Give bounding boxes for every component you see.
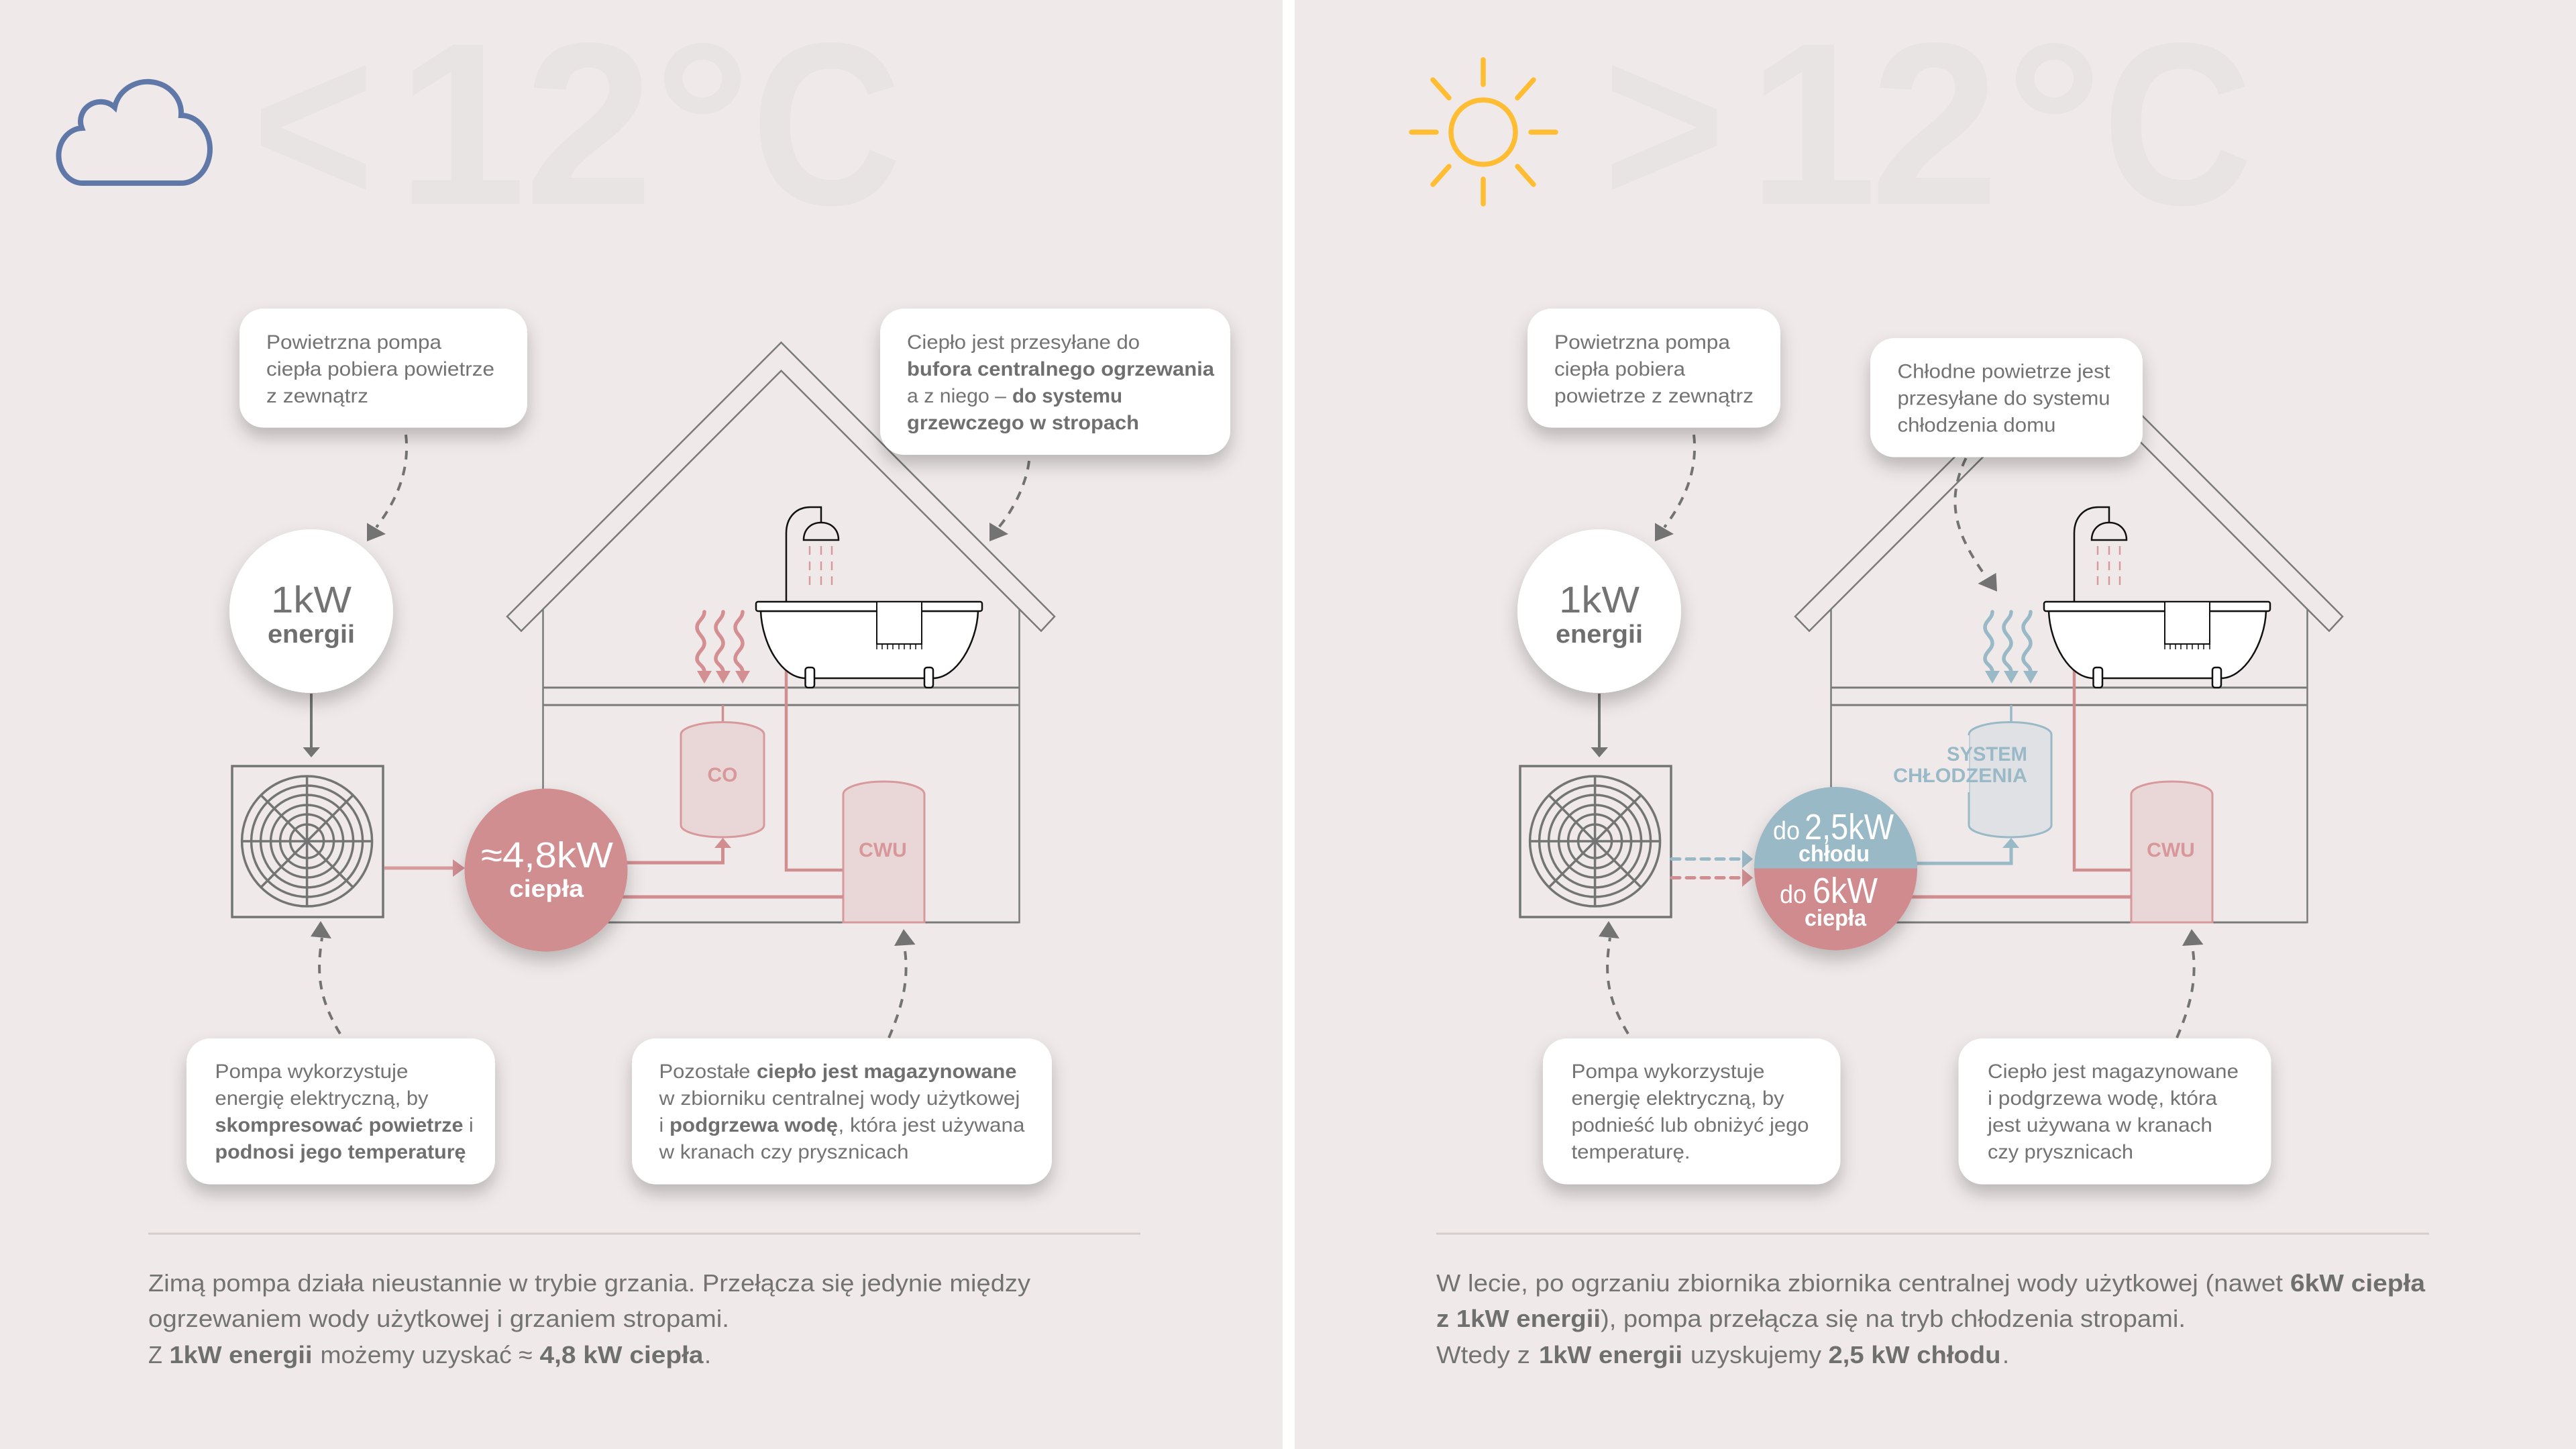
text block: summer summary: Wtedy z bbox=[1436, 1341, 1530, 1368]
callout: heat storage: i bbox=[659, 1114, 663, 1136]
callout: electricity use: temperaturę. bbox=[1571, 1141, 1690, 1163]
callout: heat storage: i podgrzewa wodę, która bbox=[1988, 1087, 2217, 1110]
callout: heat storage: ciepło jest magazynowane bbox=[757, 1061, 1017, 1083]
heading: above 12 degrees: C bbox=[2102, 0, 2253, 254]
tank: cooling system: CHŁODZENIA bbox=[1893, 765, 2027, 787]
arrow: heat to CWU tank bbox=[1905, 895, 2131, 899]
callout: heat storage: czy prysznicach bbox=[1988, 1141, 2133, 1163]
callout: heat storage: w kranach czy prysznicach bbox=[658, 1141, 908, 1163]
dashed arrow: compressor callout to fan bbox=[311, 921, 340, 1034]
callout: cool air: Chłodne powietrze jest bbox=[1897, 361, 2110, 382]
heading: below 12 degrees: 2 bbox=[525, 0, 653, 254]
tank: CWU: CWU bbox=[859, 839, 907, 861]
hot water pipe to bathtub bbox=[786, 668, 843, 870]
arrow: 1kW to fan unit bbox=[303, 694, 320, 757]
callout: heat to buffer: Ciepło jest przesyłane do bbox=[907, 331, 1140, 354]
text block: winter summary: Zimą pompa działa nieustannie w trybie grzania. Przełącza się jedynie między bbox=[148, 1269, 1030, 1297]
icon: cloud bbox=[58, 82, 210, 183]
tank: cooling system bbox=[1893, 705, 2051, 837]
circle: cooling and heating output: 2,5kW bbox=[1805, 807, 1894, 847]
circle: 1kW energy bbox=[1517, 529, 1681, 693]
circle: 1kW energy bbox=[229, 529, 393, 693]
icon: cooling waves bbox=[1985, 612, 2038, 684]
callout: heat to buffer: bufora centralnego ogrzewania bbox=[907, 358, 1214, 380]
tank: CWU bbox=[2131, 782, 2212, 922]
arrow: cold to cooling tank bbox=[1912, 838, 2019, 863]
tank: CWU: CWU bbox=[2147, 839, 2195, 861]
callout: air intake: powietrze z zewnątrz bbox=[1554, 385, 1754, 407]
circle: 1kW energy: 1kW bbox=[271, 578, 352, 621]
icon: sun bbox=[1411, 60, 1556, 204]
callout: heat storage: podgrzewa wodę bbox=[669, 1114, 838, 1136]
callout: air intake: ciepła pobiera bbox=[1554, 358, 1685, 380]
callout: heat to buffer bbox=[880, 309, 1230, 455]
callout: heat storage bbox=[1959, 1038, 2271, 1185]
text block: winter summary: 1kW energii bbox=[169, 1341, 313, 1368]
tank: cooling system: SYSTEM bbox=[1947, 743, 2027, 765]
panel: winter, below 12 degrees bbox=[58, 0, 1230, 1368]
circle: 1kW energy: energii bbox=[1556, 621, 1643, 649]
callout: cool air bbox=[1870, 338, 2143, 458]
tank: CO: CO bbox=[707, 764, 738, 786]
callout: electricity use: energię elektryczną, by bbox=[1571, 1087, 1784, 1110]
heading: above 12 degrees: 1 bbox=[1748, 0, 1877, 254]
text block: summer summary bbox=[1436, 1269, 2426, 1368]
arrow: fan unit to heat output bbox=[384, 859, 465, 877]
callout: heat to buffer: grzewczego w stropach bbox=[907, 412, 1139, 434]
tank: CO bbox=[681, 705, 764, 837]
callout: air intake bbox=[1527, 309, 1780, 428]
heading: below 12 degrees: ° bbox=[653, 0, 751, 254]
callout: electricity use: podnieść lub obniżyć jego bbox=[1571, 1114, 1809, 1136]
circle: cooling and heating output: do bbox=[1773, 817, 1800, 845]
callout: compression: podnosi jego temperaturę bbox=[215, 1141, 466, 1163]
text block: winter summary: . bbox=[704, 1341, 711, 1368]
text block: winter summary bbox=[148, 1269, 1030, 1368]
callout: heat storage bbox=[632, 1038, 1052, 1185]
heading: below 12 degrees bbox=[252, 0, 902, 254]
callout: heat storage: w zbiorniku centralnej wody użytkowej bbox=[658, 1087, 1020, 1110]
dashed arrow: storage callout to CWU bbox=[2177, 929, 2203, 1038]
callout: compression bbox=[186, 1038, 495, 1185]
heading: below 12 degrees: 1 bbox=[397, 0, 526, 254]
circle: 4.8kW heat: ciepła bbox=[509, 875, 584, 902]
dashed arrow: heat to ceiling system bbox=[989, 461, 1029, 541]
circle: 4.8kW heat: ≈4,8kW bbox=[481, 835, 613, 875]
circle: 1kW energy: 1kW bbox=[1559, 578, 1640, 621]
callout: cool air: przesyłane do systemu bbox=[1897, 388, 2110, 409]
icon: heat waves bbox=[697, 612, 750, 684]
heading: above 12 degrees: > bbox=[1603, 0, 1725, 254]
text block: summer summary: 6kW ciepła bbox=[2290, 1269, 2426, 1297]
circle: cooling and heating output bbox=[1754, 787, 1917, 950]
callout: heat storage: Ciepło jest magazynowane bbox=[1988, 1061, 2239, 1083]
dashed arrow: electricity callout to fan bbox=[1599, 921, 1628, 1034]
arrow: heat to CO tank bbox=[624, 838, 731, 863]
text block: winter summary: 4,8 kW ciepła bbox=[539, 1341, 704, 1368]
circle: cooling and heating output: ciepła bbox=[1805, 906, 1867, 931]
house outline bbox=[1795, 342, 2343, 922]
icon: shower bbox=[2074, 507, 2127, 602]
circle: 4.8kW heat bbox=[464, 789, 628, 951]
arrow: 1kW to fan unit bbox=[1591, 694, 1608, 757]
text block: summer summary: . bbox=[2002, 1341, 2009, 1368]
heading: below 12 degrees: C bbox=[751, 0, 902, 254]
circle: cooling and heating output: do bbox=[1780, 881, 1807, 909]
callout: heat storage: jest używana w kranach bbox=[1987, 1114, 2212, 1136]
callout: heat to buffer: do systemu bbox=[1012, 385, 1122, 407]
icon: outdoor fan unit bbox=[232, 766, 383, 917]
callout: compression: i bbox=[469, 1114, 474, 1136]
icon: shower bbox=[786, 507, 839, 602]
callout: air intake bbox=[239, 309, 527, 428]
text block: summer summary: W lecie, po ogrzaniu zbiornika zbiornika centralnej wody użytkowej (nawet bbox=[1436, 1269, 2283, 1297]
callout: electricity use bbox=[1543, 1038, 1841, 1185]
text block: winter summary: ogrzewaniem wody użytkowej i grzaniem stropami. bbox=[148, 1305, 729, 1332]
text block: winter summary: możemy uzyskać ≈ bbox=[321, 1341, 533, 1368]
heading: above 12 degrees bbox=[1603, 0, 2253, 254]
dashed arrow: air intake bbox=[1655, 435, 1695, 541]
text block: summer summary: 1kW energii bbox=[1539, 1341, 1682, 1368]
heading: above 12 degrees: ° bbox=[2005, 0, 2103, 254]
tank: CWU bbox=[843, 782, 924, 922]
callout: compression: energię elektryczną, by bbox=[215, 1087, 428, 1110]
circle: cooling and heating output: 6kW bbox=[1813, 871, 1878, 911]
text block: winter summary: Z bbox=[148, 1341, 162, 1368]
icon: outdoor fan unit bbox=[1520, 766, 1671, 917]
callout: air intake: ciepła pobiera powietrze bbox=[266, 358, 494, 380]
callout: heat to buffer: a z niego – bbox=[907, 385, 1006, 407]
arrow: heat to CWU tank bbox=[617, 895, 843, 899]
dashed arrow: heating flow bbox=[1672, 869, 1753, 887]
dashed arrow: cool air into house bbox=[1955, 458, 1997, 592]
heading: below 12 degrees: < bbox=[252, 0, 374, 254]
callout: air intake: z zewnątrz bbox=[266, 385, 368, 407]
house outline bbox=[507, 342, 1055, 922]
dashed arrow: storage callout to CWU bbox=[889, 929, 915, 1038]
circle: cooling and heating output: chłodu bbox=[1799, 841, 1870, 867]
text block: summer summary: z 1kW energii bbox=[1436, 1305, 1601, 1332]
heading: above 12 degrees: 2 bbox=[1870, 0, 1999, 254]
icon: bathtub bbox=[756, 602, 982, 688]
panel: summer, above 12 degrees bbox=[1411, 0, 2429, 1368]
callout: cool air: chłodzenia domu bbox=[1897, 415, 2055, 436]
text block: summer summary: 2,5 kW chłodu bbox=[1829, 1341, 2000, 1368]
circle: 1kW energy: energii bbox=[268, 621, 355, 649]
callout: compression: skompresować powietrze bbox=[215, 1114, 463, 1136]
callout: compression: Pompa wykorzystuje bbox=[215, 1061, 408, 1083]
icon: bathtub bbox=[2044, 602, 2270, 688]
callout: electricity use: Pompa wykorzystuje bbox=[1571, 1061, 1764, 1083]
callout: heat storage: Pozostałe bbox=[659, 1061, 750, 1083]
dashed arrow: air intake bbox=[367, 435, 407, 541]
text block: summer summary: ), pompa przełącza się na tryb chłodzenia stropami. bbox=[1601, 1305, 2186, 1332]
dashed arrow: cooling flow bbox=[1672, 850, 1753, 868]
callout: air intake: Powietrzna pompa bbox=[1554, 331, 1730, 354]
callout: heat storage: , która jest używana bbox=[839, 1114, 1025, 1136]
text block: summer summary: uzyskujemy bbox=[1690, 1341, 1821, 1368]
hot water pipe to bathtub bbox=[2074, 668, 2131, 870]
callout: air intake: Powietrzna pompa bbox=[266, 331, 441, 354]
